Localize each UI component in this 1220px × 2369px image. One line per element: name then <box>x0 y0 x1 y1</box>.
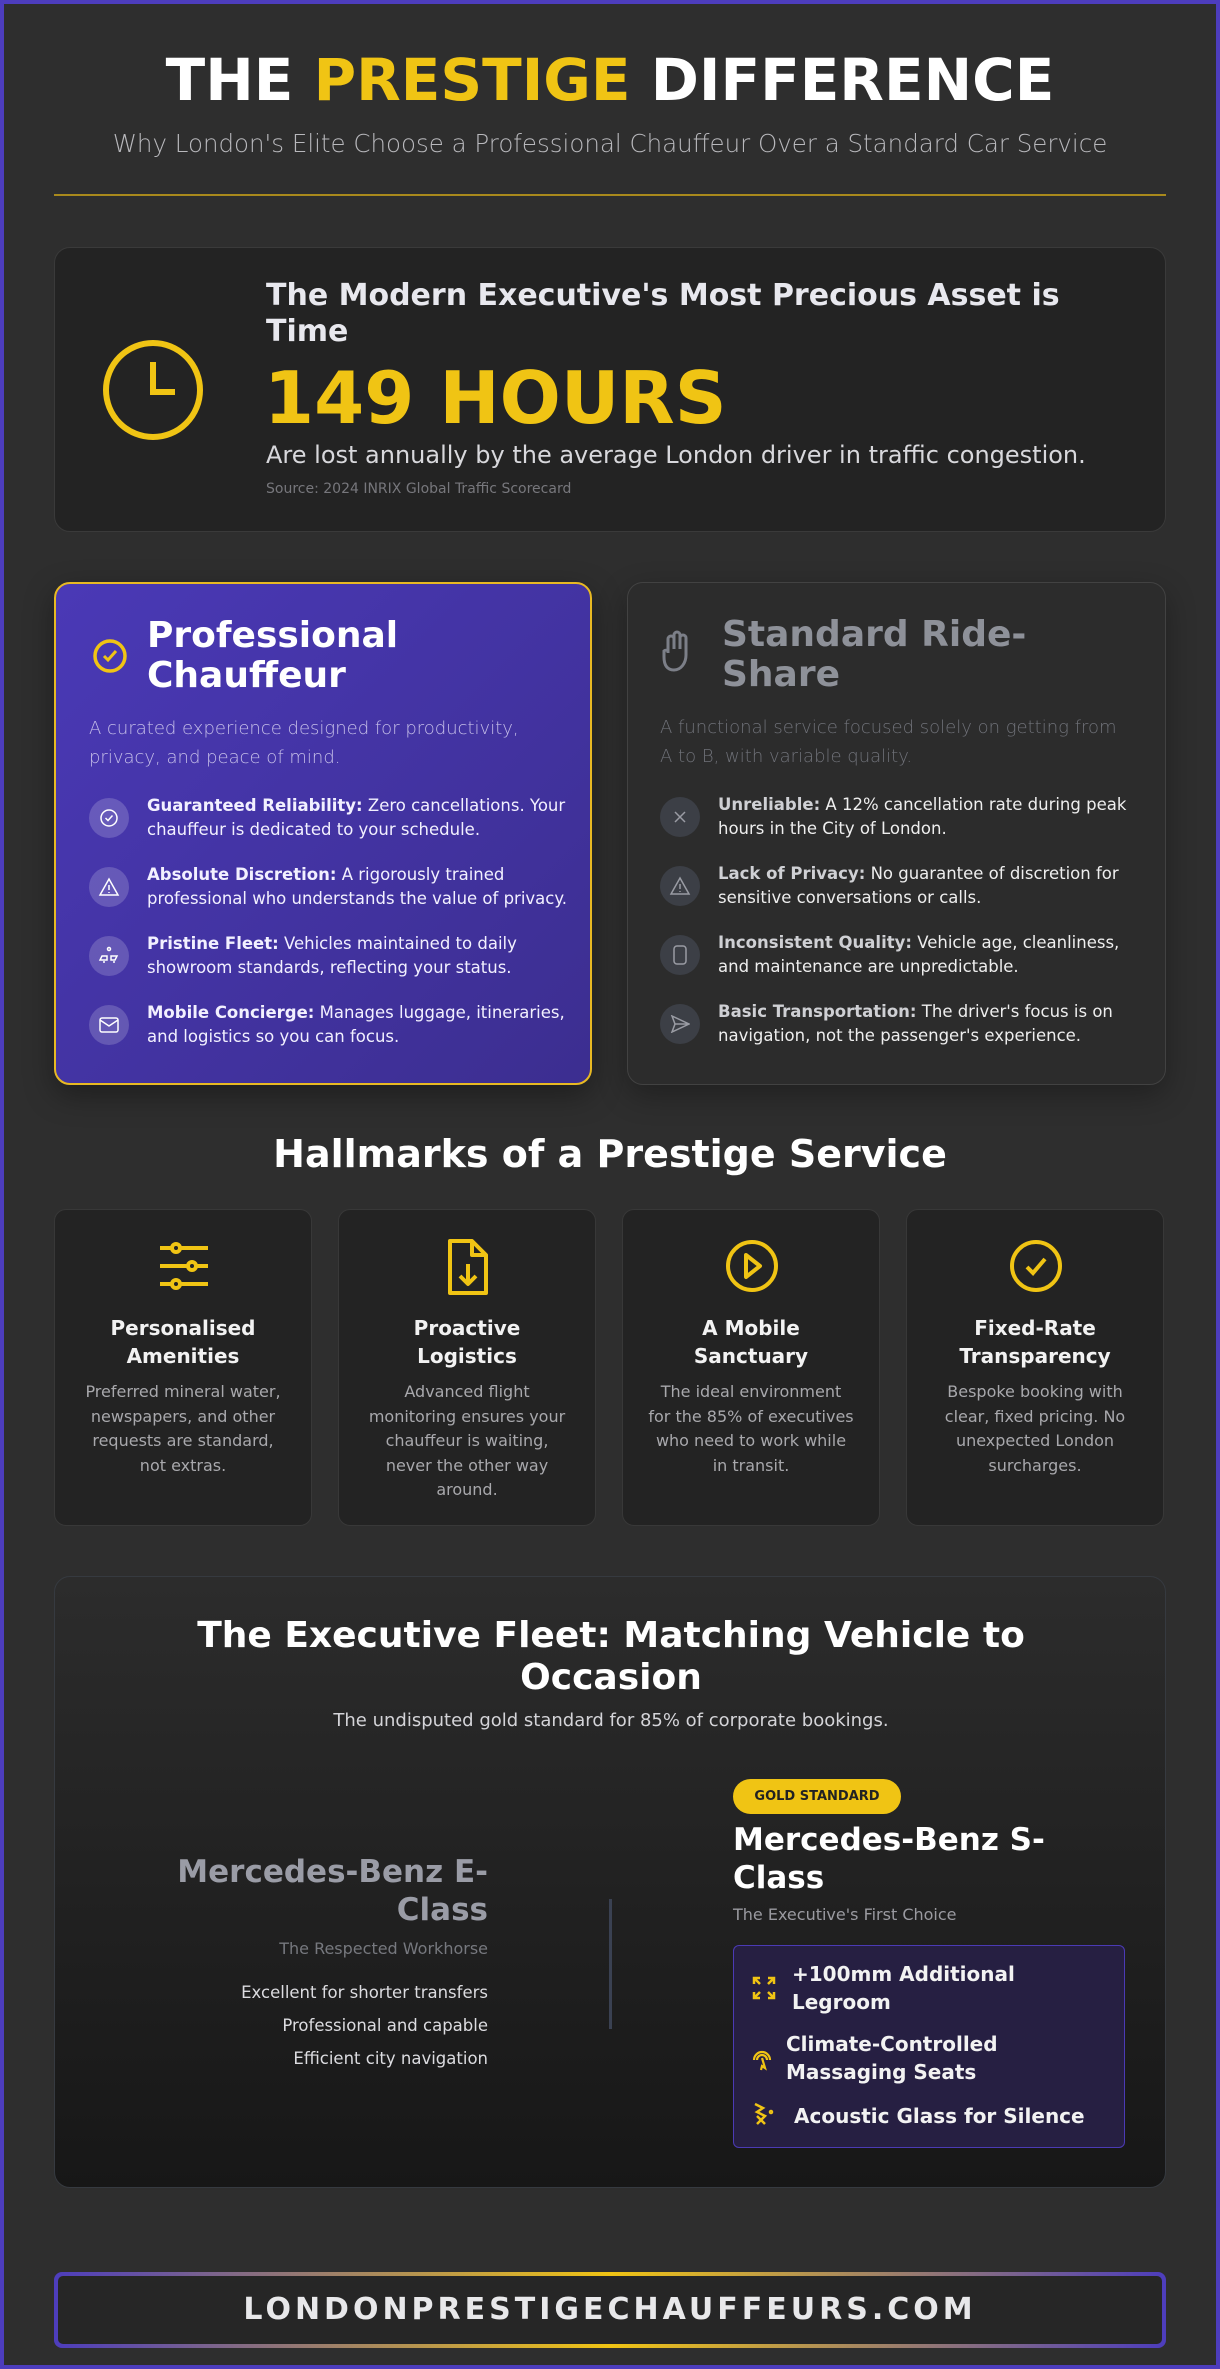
icon: check circle <box>1010 1240 1062 1292</box>
vehicle: E-class: Efficient city navigation <box>293 2049 488 2068</box>
icon: file download <box>448 1239 488 1295</box>
vehicle: E-class: Excellent for shorter transfers <box>241 1983 488 2002</box>
card: fixed-rate transparency <box>906 1209 1164 1526</box>
vehicle: S-class <box>732 1779 1125 2148</box>
heading: Standard Ride- <box>722 614 1026 655</box>
description: Are lost annually by the average London driver in traffic congestion. <box>266 441 1086 469</box>
heading: hallmarks: Hallmarks of a Prestige Service <box>273 1132 947 1176</box>
card: mobile sanctuary: A Mobile <box>702 1316 800 1340</box>
footer: website <box>54 2272 1166 2348</box>
card: mobile sanctuary: The ideal environment <box>661 1382 841 1401</box>
card: mobile sanctuary: in transit. <box>713 1456 789 1474</box>
card: proactive logistics: Proactive <box>414 1316 520 1340</box>
feature legroom <box>792 1962 1015 2014</box>
heading: Share <box>722 654 840 695</box>
panel: standard ride-share <box>627 582 1166 1085</box>
vehicle: E-class: Mercedes-Benz E- <box>177 1854 488 1890</box>
card: personalised amenities <box>54 1209 312 1526</box>
card: personalised amenities: Preferred mineral water, newspapers, and other requests are standard, not extras. <box>85 1382 281 1474</box>
icon: clock <box>103 340 203 440</box>
heading: Chauffeur <box>147 655 346 696</box>
card: fixed-rate transparency: Transparency <box>959 1344 1111 1368</box>
title: Mercedes-Benz S- <box>733 1822 1045 1858</box>
card: proactive logistics: Logistics <box>417 1344 517 1368</box>
vehicle: E-class: Class <box>397 1892 488 1928</box>
card: mobile sanctuary: for the 85% of executives <box>648 1406 854 1426</box>
list <box>660 795 1126 1045</box>
heading: Professional <box>147 615 398 656</box>
feature seats <box>786 2032 998 2084</box>
title: Class <box>733 1860 824 1896</box>
icon: play circle <box>726 1240 778 1292</box>
item reliability: Guaranteed Reliability: Zero cancellations. Your chauffeur is dedicated to your schedule. <box>147 796 565 839</box>
vehicle: S-class: The Executive's First Choice <box>733 1905 957 1924</box>
item fleet: Pristine Fleet: Vehicles maintained to daily showroom standards, reflecting your status. <box>147 934 517 977</box>
card: mobile sanctuary <box>622 1209 880 1526</box>
card: proactive logistics <box>338 1209 596 1526</box>
panel: time stat <box>54 247 1166 532</box>
card: fixed-rate transparency: Fixed-Rate <box>974 1316 1096 1340</box>
feature seats: Climate-Controlled <box>786 2032 998 2056</box>
card: mobile sanctuary: Sanctuary <box>694 1344 808 1368</box>
item concierge: Mobile Concierge: Manages luggage, itineraries, and logistics so you can focus. <box>147 1003 565 1046</box>
vehicle: E-class <box>177 1854 488 2068</box>
footer: website: LONDONPRESTIGECHAUFFEURS.COM <box>243 2292 977 2327</box>
list <box>89 796 567 1046</box>
card: proactive logistics: Advanced flight monitoring ensures your chauffeur is waiting, never the other way around. <box>369 1382 565 1499</box>
icon: check <box>93 639 127 673</box>
title: THE PRESTIGE DIFFERENCE <box>166 46 1054 114</box>
heading: The Executive Fleet: Matching Vehicle to Occasion <box>197 1615 1025 1698</box>
item basic: Basic Transportation: The driver's focus is on navigation, not the passenger's experience. <box>718 1002 1113 1045</box>
badge: GOLD STANDARD <box>754 1789 880 1804</box>
item quality: Inconsistent Quality: Vehicle age, cleanliness, and maintenance are unpredictable. <box>718 933 1119 976</box>
card: fixed-rate transparency: Bespoke booking with clear, fixed pricing. No unexpected London surcharges. <box>945 1382 1125 1474</box>
feature glass: Acoustic Glass for Silence <box>794 2104 1085 2128</box>
panel: professional chauffeur <box>54 582 592 1085</box>
card: personalised amenities: Personalised <box>111 1316 255 1340</box>
item discretion: Absolute Discretion: A rigorously trained professional who understands the value of privacy. <box>147 865 567 908</box>
big number: 149 HOURS <box>264 356 727 440</box>
icon: sliders <box>160 1242 208 1290</box>
subtitle: Why London's Elite Choose a Professional Chauffeur Over a Standard Car Service <box>113 129 1107 158</box>
feature seats: Massaging Seats <box>786 2060 976 2084</box>
feature box <box>733 1945 1125 2148</box>
heading <box>147 615 398 696</box>
icon: hand <box>662 630 688 672</box>
feature legroom: +100mm Additional <box>792 1962 1015 1986</box>
description: A functional service focused solely on getting from A to B, with variable quality. <box>660 717 1117 767</box>
description: A curated experience designed for productivity, privacy, and peace of mind. <box>89 718 519 768</box>
subheading: The undisputed gold standard for 85% of corporate bookings. <box>333 1710 889 1731</box>
heading: The Modern Executive's Most Precious Asset is Time <box>266 278 1060 349</box>
panel: executive fleet <box>54 1576 1166 2188</box>
item unreliable: Unreliable: A 12% cancellation rate during peak hours in the City of London. <box>718 795 1126 838</box>
source: Source: 2024 INRIX Global Traffic Scorecard <box>266 481 571 497</box>
feature legroom: Legroom <box>792 1990 891 2014</box>
heading <box>722 614 1026 695</box>
badge <box>733 1779 901 1814</box>
item privacy: Lack of Privacy: No guarantee of discretion for sensitive conversations or calls. <box>718 864 1119 907</box>
card: personalised amenities: Amenities <box>127 1344 239 1368</box>
card: mobile sanctuary: who need to work while <box>656 1431 846 1450</box>
title <box>733 1822 1045 1896</box>
vehicle: E-class: Professional and capable <box>282 2016 488 2035</box>
vehicle: E-class: The Respected Workhorse <box>279 1939 488 1958</box>
